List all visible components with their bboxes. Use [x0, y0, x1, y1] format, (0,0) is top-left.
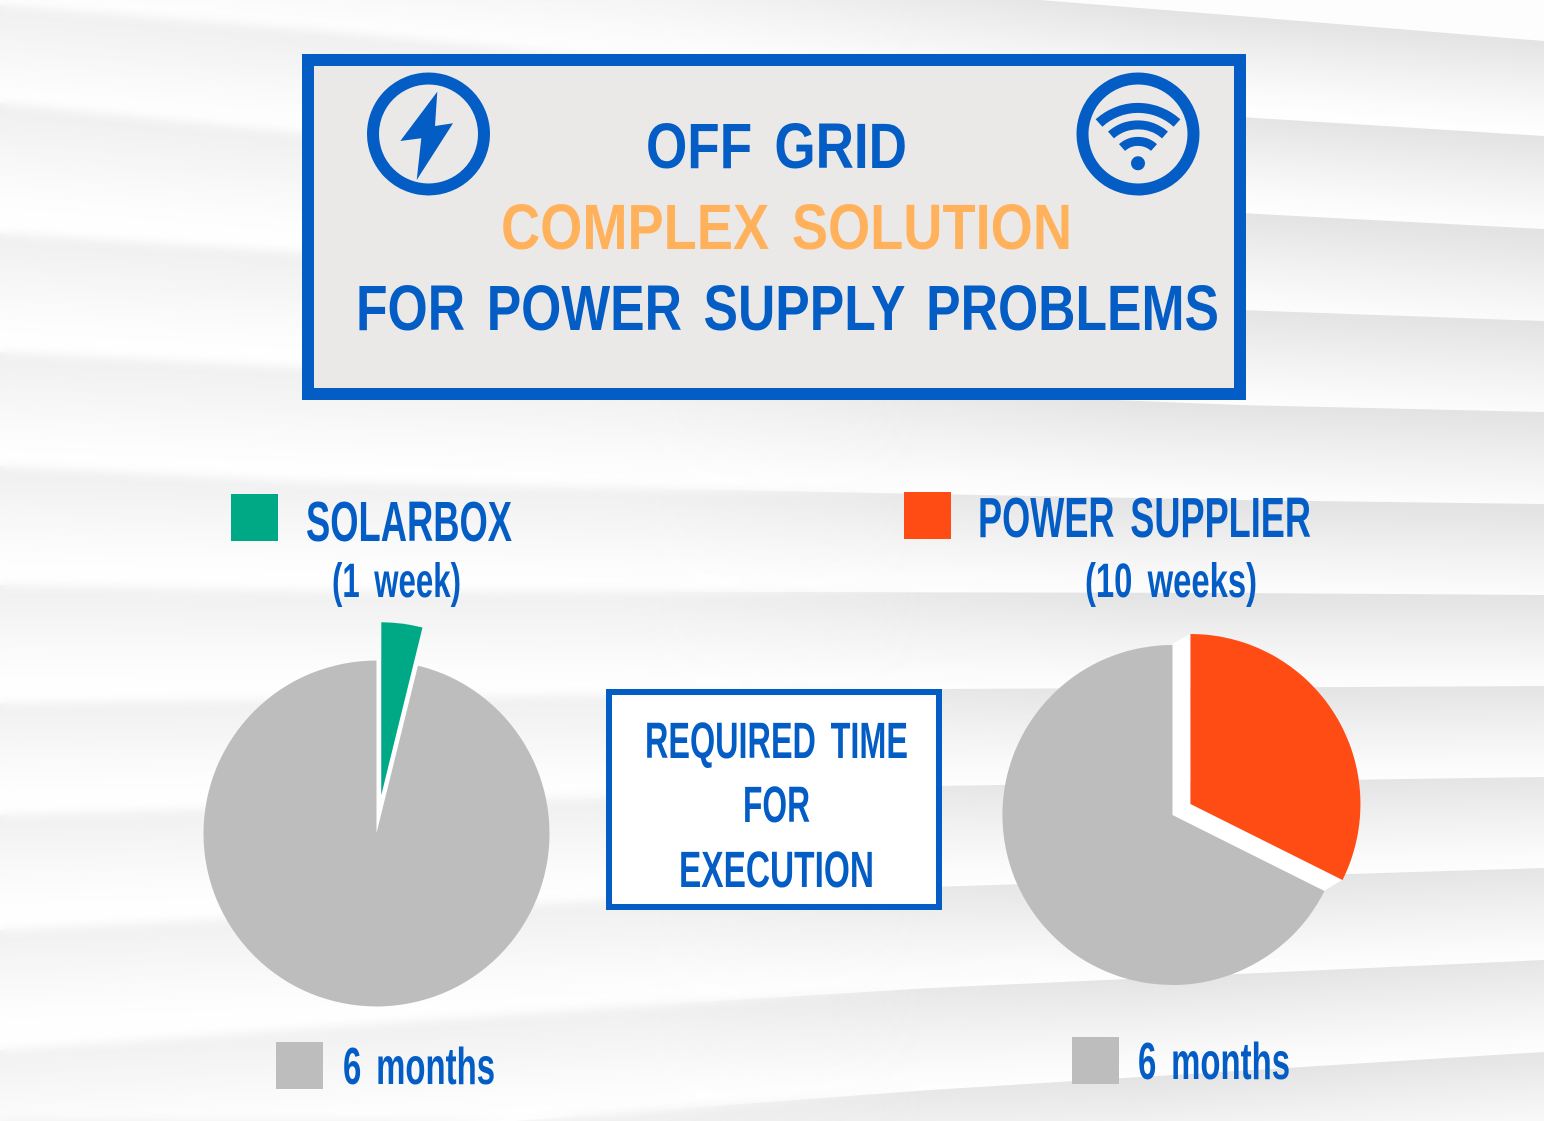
- legend: solarbox: (1 week): [332, 555, 461, 608]
- header panel: [308, 60, 1240, 394]
- legend: 6 months right: 6 months: [1138, 1033, 1290, 1091]
- legend: solarbox: SOLARBOX: [306, 490, 512, 554]
- legend: 6 months left: [276, 1038, 495, 1096]
- icon: wifi in circle: [1082, 78, 1194, 190]
- legend: 6 months left: 6 months: [343, 1038, 495, 1096]
- title line 1: OFF GRID: [646, 110, 907, 182]
- callout: required time for execution: FOR: [743, 776, 810, 833]
- title line 3: FOR POWER SUPPLY PROBLEMS: [356, 272, 1219, 344]
- callout: required time for execution: EXECUTION: [679, 841, 874, 898]
- pie chart: solarbox: [204, 622, 550, 1006]
- callout: required time for execution: REQUIRED TIME: [645, 712, 908, 769]
- callout: required time for execution: [609, 692, 939, 907]
- pie chart: power supplier: [1002, 634, 1360, 985]
- legend: solarbox: [231, 490, 512, 608]
- icon: lightning bolt in circle: [373, 78, 484, 190]
- title line 2: COMPLEX SOLUTION: [501, 191, 1072, 263]
- legend: power supplier: POWER SUPPLIER: [978, 486, 1311, 550]
- legend: power supplier: (10 weeks): [1085, 555, 1257, 608]
- legend: 6 months right: [1072, 1033, 1290, 1091]
- legend: power supplier: [904, 486, 1311, 608]
